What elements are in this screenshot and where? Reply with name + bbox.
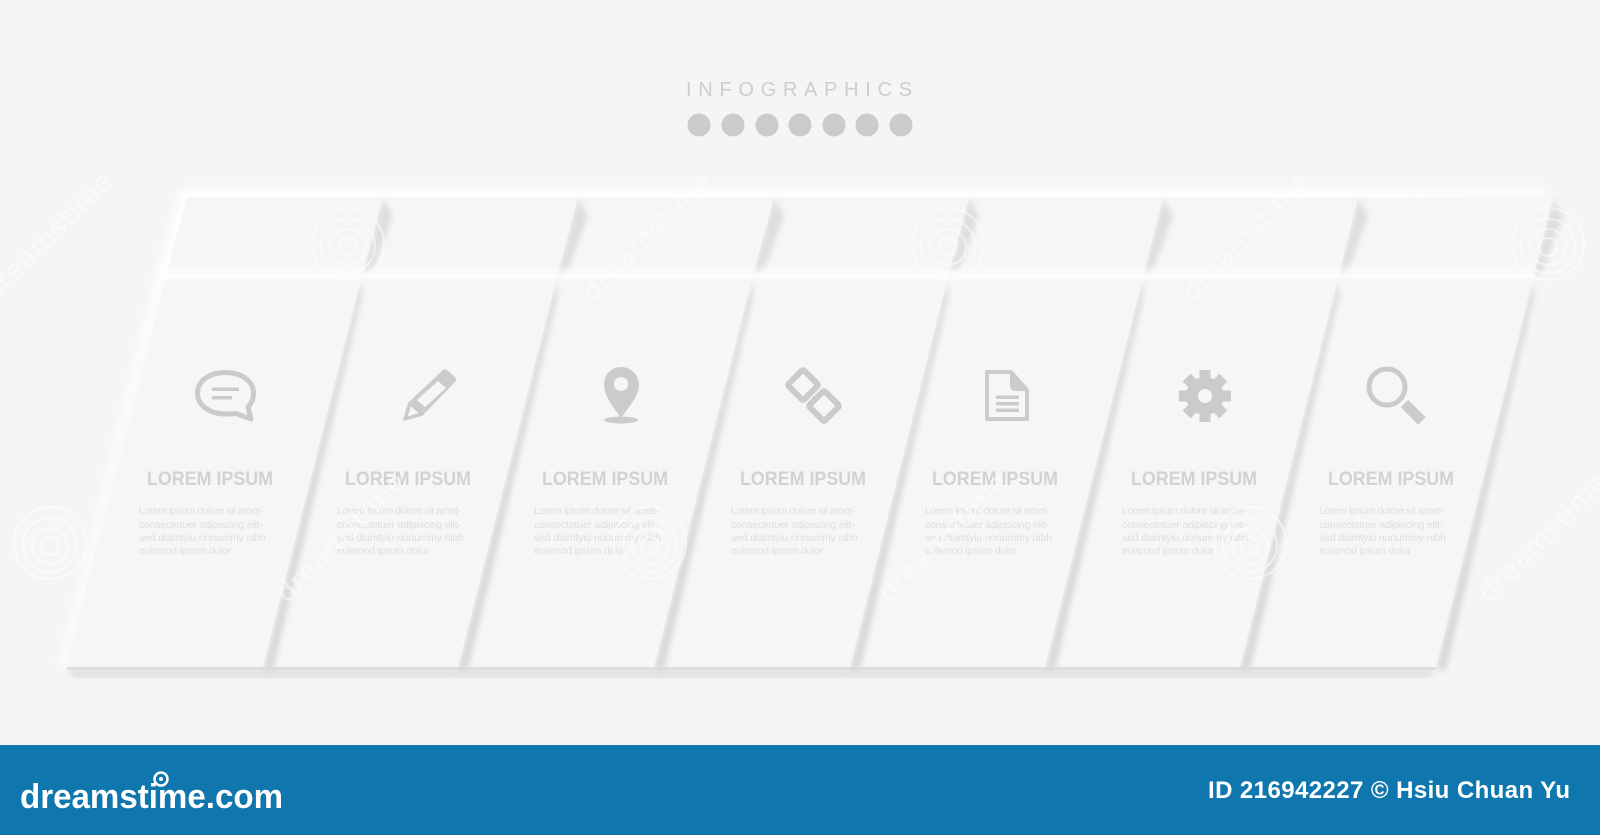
text block 5: euismod ipsum dolor — [925, 545, 1018, 557]
text block 6: consectetuer adipiscing elit- — [1122, 519, 1246, 531]
text block 1: Lorem ipsum dolore sit amet- — [139, 505, 264, 517]
upper band — [156, 189, 1563, 279]
text block 1 — [139, 505, 266, 557]
footer bar — [0, 745, 1600, 835]
icon: document — [987, 371, 1029, 419]
text block 5 — [925, 505, 1052, 557]
text block 7: sed diamtyiu nonummy nibh — [1319, 532, 1446, 544]
logo: dreamstime.com — [20, 778, 283, 816]
column 6 — [1045, 279, 1339, 670]
icon: chain link — [787, 369, 840, 422]
text block 3: euismod ipsum dolor — [534, 545, 626, 557]
text block 5: sed diamtyiu nonummy nibh — [925, 532, 1052, 544]
text block 2: consectetuer adipiscing elit- — [337, 519, 462, 531]
text block 4: Lorem ipsum dolore sit amet- — [731, 505, 856, 517]
heading 7: LOREM IPSUM — [1328, 469, 1454, 490]
text block 6 — [1122, 505, 1249, 557]
text block 5: consectetuer adipiscing elit- — [925, 519, 1050, 531]
text block 3: sed diamtyiu nonummy nibh — [534, 532, 661, 544]
text block 7: euismod ipsum dolor — [1319, 545, 1412, 557]
text block 3 — [534, 505, 661, 557]
watermark — [0, 166, 1600, 609]
text block 6: euismod ipsum dolor — [1122, 545, 1214, 557]
watermark: dreamstime — [270, 467, 412, 609]
text block 3: consectetuer adipiscing elit- — [534, 519, 658, 531]
text block 6: Lorem ipsum dolore sit amet- — [1122, 505, 1246, 517]
heading 2: LOREM IPSUM — [345, 469, 471, 490]
icon: speech bubble — [198, 372, 254, 419]
column 3 — [458, 279, 753, 670]
text block 2 — [337, 505, 464, 557]
heading 1: LOREM IPSUM — [147, 469, 273, 490]
text block 6: sed diamtyiu nonummy nibh — [1122, 532, 1249, 544]
column 5 — [850, 279, 1144, 670]
text block 2: sed diamtyiu nonummy nibh — [337, 532, 464, 544]
icon: gear — [1179, 370, 1231, 422]
column 2 — [263, 279, 558, 670]
text block 2: euismod ipsum dolor — [337, 545, 430, 557]
text block 7: consectetuer adipiscing elit- — [1319, 519, 1444, 531]
heading 3: LOREM IPSUM — [542, 469, 668, 490]
text block 4: sed diamtyiu nonummy nibh — [731, 532, 858, 544]
icon: pencil — [405, 369, 456, 419]
text block 7 — [1319, 505, 1446, 557]
icon: map pin — [604, 367, 639, 424]
column 1 — [67, 279, 362, 670]
heading 6: LOREM IPSUM — [1131, 469, 1257, 490]
text block 1: sed diamtyiu nonummy nibh — [139, 532, 266, 544]
text block 4 — [731, 505, 858, 557]
image credit: ID 216942227 © Hsiu Chuan Yu — [1208, 777, 1570, 804]
text block 1: consectetuer adipiscing elit- — [139, 519, 264, 531]
column 7 — [1240, 279, 1534, 670]
text block 3: Lorem ipsum dolore sit amet- — [534, 505, 658, 517]
heading 4: LOREM IPSUM — [740, 469, 866, 490]
watermark: dreamstime — [576, 166, 718, 308]
text block 7: Lorem ipsum dolore sit amet- — [1319, 505, 1444, 517]
heading 5: LOREM IPSUM — [932, 469, 1058, 490]
watermark: dreamstime — [872, 467, 1014, 609]
column 4 — [654, 279, 948, 670]
icon: magnifier — [1369, 369, 1422, 421]
title: INFOGRAPHICS — [686, 79, 912, 101]
text block 4: consectetuer adipiscing elit- — [731, 519, 856, 531]
text block 4: euismod ipsum dolor — [731, 545, 824, 557]
lower band shadow and highlight — [59, 271, 1533, 678]
text block 2: Lorem ipsum dolore sit amet- — [337, 505, 462, 517]
watermark: dreamstime — [1175, 166, 1317, 308]
text block 1: euismod ipsum dolor — [139, 545, 232, 557]
text block 5: Lorem ipsum dolore sit amet- — [925, 505, 1050, 517]
dots row — [688, 114, 912, 136]
